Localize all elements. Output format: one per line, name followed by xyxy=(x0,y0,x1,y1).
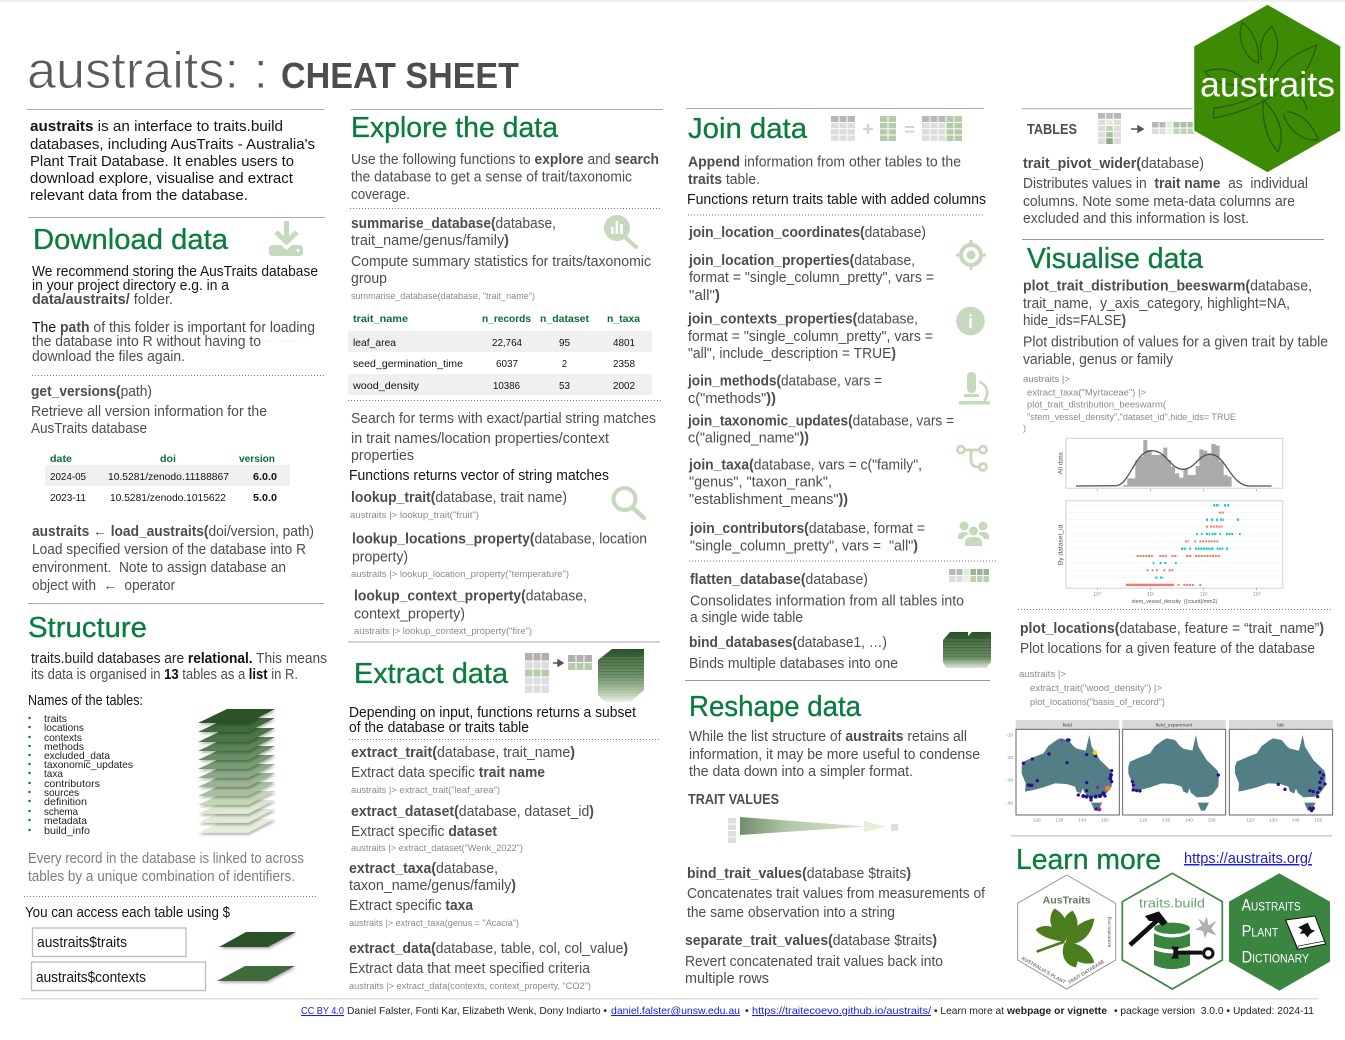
function: plot_trait_distribution_beeswarm xyxy=(1023,279,1328,368)
text: access tables: You can access each table using $ xyxy=(25,905,230,921)
function: join_contexts_properties: format = "single_column_pretty", vars = xyxy=(688,329,933,345)
illustration: stacked tables xyxy=(198,709,275,833)
label: trait values: TRAIT VALUES xyxy=(688,792,779,808)
chart: australia location maps: -40 xyxy=(1006,800,1013,805)
function: summarise_database: group xyxy=(351,271,387,287)
table: summary statistics: seed_germination_time xyxy=(353,358,463,370)
function: separate_trait_values: separate_trait_values(database $traits) xyxy=(685,933,937,949)
chart: australia location maps: 120 xyxy=(1139,817,1148,822)
text: join intro: Append information from other tables to the xyxy=(688,155,961,171)
list: names of the tables: locations xyxy=(44,722,84,734)
function: extract_taxa: extract_taxa(database, xyxy=(349,861,498,877)
chart: australia location maps: field_experiment xyxy=(1156,723,1193,729)
function: join_taxonomic_updates: c("aligned_name")) xyxy=(688,431,809,447)
table: summary statistics: n_taxa xyxy=(607,313,640,325)
function: join_contributors: join_contributors(database, format = xyxy=(689,521,925,537)
text: relational description: its data is organised in 13 tables as a list in R. xyxy=(31,667,298,683)
chart: histogram and density: All data xyxy=(1057,452,1064,474)
icon: microscope xyxy=(959,372,990,404)
function: load_austraits: Load specified version of the database into R xyxy=(32,542,306,558)
list: names of the tables: Names of the tables: xyxy=(28,693,143,709)
panel: tables pivot xyxy=(1022,109,1308,227)
function: join_contexts_properties: "all", include_description = TRUE) xyxy=(688,346,896,362)
text: storage recommendation: We recommend storing the AusTraits database xyxy=(32,264,318,280)
chart: beeswarm by dataset: 10² xyxy=(1200,592,1208,598)
function: flatten_database: a single wide table xyxy=(690,610,803,626)
function: lookup_trait: lookup_trait(database, trait name) xyxy=(351,490,567,506)
function: extract_trait: austraits |> extract_trait("leaf_area") xyxy=(351,785,500,795)
heading: download data: Download data xyxy=(33,224,229,256)
chart: australia location maps: 140 xyxy=(1078,817,1087,822)
function: separate_trait_values: multiple rows xyxy=(685,971,769,987)
table: versions: 2024-05 xyxy=(50,471,86,483)
function: flatten_database: Consolidates information from all tables into xyxy=(690,594,964,610)
function: extract_data xyxy=(349,941,628,991)
table: summary statistics: 95 xyxy=(559,337,570,349)
text: storage recommendation: data/austraits/ folder. xyxy=(32,292,173,308)
code: plot_locations example: plot_locations("basis_of_record") xyxy=(1030,697,1165,707)
function: join_contexts_properties xyxy=(687,312,933,362)
code: beeswarm example: extract_taxa("Myrtaceae") |> xyxy=(1027,388,1146,398)
chart: beeswarm by dataset: By dataset_id xyxy=(1057,525,1064,565)
logo: traits.build hexagon: traits.build xyxy=(1139,896,1205,911)
list: names of the tables: sources xyxy=(44,787,79,799)
text: reshape intro xyxy=(689,729,980,780)
panel: introduction xyxy=(27,110,324,204)
heading: explore the data: Explore the data xyxy=(351,112,559,144)
icon: magnifier xyxy=(614,488,644,518)
function: join_methods: c("methods")) xyxy=(688,391,776,407)
function: extract_data: austraits |> extract_data(contexts, context_property, "CO2") xyxy=(349,981,591,991)
chart: histogram and density xyxy=(1057,438,1283,488)
chart: australia location maps: 140 xyxy=(1292,817,1300,822)
function: trait_pivot_wider: trait_pivot_wider(database) xyxy=(1023,156,1204,172)
function: load_austraits: environment. Note to assign database an xyxy=(32,560,286,576)
chart: australia location maps: 120 xyxy=(1033,817,1041,822)
text: search description: in trait names/location properties/context xyxy=(351,431,609,447)
text: extract intro xyxy=(349,705,636,736)
chart: australia location maps: -10 xyxy=(1006,733,1013,738)
function: lookup_context_property: context_property) xyxy=(354,607,465,623)
panel: introduction: databases, including AusTraits - Australia's xyxy=(30,137,315,153)
link: austraits.org: https://austraits.org/ xyxy=(1184,850,1313,867)
heading: extract data: Extract data xyxy=(354,658,509,690)
list: names of the tables: taxonomic_updates xyxy=(44,759,133,771)
icon: flattened table xyxy=(949,569,989,582)
title: austraits: : xyxy=(27,42,268,100)
icon: traits layer xyxy=(219,932,296,947)
heading: learn more: Learn more xyxy=(1016,844,1161,876)
panel: extract data xyxy=(348,642,660,991)
text: join intro xyxy=(687,155,986,208)
logo: AusTraits hexagon: AusTraits xyxy=(1043,895,1091,906)
text: extract intro: Depending on input, functions returns a subset xyxy=(349,705,636,721)
panel: learn more xyxy=(1011,836,1332,991)
icon: people xyxy=(958,522,989,546)
chart: beeswarm by dataset xyxy=(1057,489,1283,605)
function: lookup_locations_property: lookup_locations_property(database, location xyxy=(352,532,647,548)
function: flatten_database xyxy=(690,572,964,626)
table: summary statistics xyxy=(348,313,652,395)
chart: beeswarm by dataset: 10³ xyxy=(1253,592,1261,598)
function: plot_trait_distribution_beeswarm: Plot distribution of values for a given trait by table xyxy=(1023,335,1328,351)
icon: contexts layer xyxy=(217,966,295,981)
logo: austraits hexagon xyxy=(1194,4,1341,173)
function: summarise_database xyxy=(351,216,651,301)
text: join intro: traits table. xyxy=(688,172,760,188)
chart: australia location maps: -30 xyxy=(1006,778,1013,783)
text: search description: Functions returns vector of string matches xyxy=(349,468,609,484)
logo: AusTraits hexagon: TRAIT DATABASE xyxy=(1067,959,1106,986)
function: join_taxonomic_updates xyxy=(687,414,954,447)
function: extract_taxa xyxy=(349,861,519,928)
chart: australia location maps: 150 xyxy=(1314,817,1323,822)
box: austraits$traits: austraits$traits xyxy=(37,935,127,951)
panel: introduction: austraits is an interface to traits.build xyxy=(30,119,283,135)
table: versions: 10.5281/zenodo.11188867 xyxy=(108,471,229,483)
icon: chart magnifier xyxy=(604,215,636,247)
panel: join data xyxy=(686,108,996,672)
logo: austraits hexagon: austraits xyxy=(1200,66,1335,104)
function: lookup_context_property: lookup_context_property(database, xyxy=(354,589,587,605)
logo: AusTraits hexagon xyxy=(1018,875,1116,989)
icon: location target xyxy=(956,240,986,270)
box: austraits$contexts xyxy=(32,962,206,990)
list: names of the tables: traits xyxy=(44,713,67,725)
function: join_location_properties xyxy=(688,253,934,304)
function: join_location_properties: format = "single_column_pretty", vars = xyxy=(689,270,934,286)
function: lookup_trait: austraits |> lookup_trait("fruit") xyxy=(350,510,479,520)
chart: australia location maps xyxy=(1006,720,1333,822)
function: join_location_properties: "all") xyxy=(689,288,720,304)
list: names of the tables: taxa xyxy=(44,768,63,780)
list: names of the tables: excluded_data xyxy=(44,750,110,762)
function: extract_data: Extract data that meet specified criteria xyxy=(349,961,591,977)
panel: visualise data xyxy=(1006,240,1333,822)
function: join_taxa: "genus", "taxon_rank", xyxy=(689,475,832,491)
text: relational description: traits.build databases are relational. This means xyxy=(31,651,327,667)
function: extract_trait: extract_trait(database, trait_name) xyxy=(351,745,575,761)
icon: stacked tables xyxy=(598,649,644,702)
function: lookup_locations_property xyxy=(351,532,647,579)
footer xyxy=(21,999,1318,1017)
list: names of the tables: definition xyxy=(44,796,87,808)
function: join_taxa xyxy=(688,458,922,508)
text: reshape intro: the data down into a simpler format. xyxy=(689,764,913,780)
function: join_taxa: "establishment_means")) xyxy=(689,492,848,508)
text: storage recommendation xyxy=(32,264,318,365)
table: summary statistics: 53 xyxy=(559,380,570,392)
function: bind_trait_values: the same observation into a string xyxy=(687,905,895,921)
function: summarise_database: Compute summary statistics for traits/taxonomic xyxy=(351,254,651,270)
text: search description: Search for terms with exact/partial string matches xyxy=(351,411,656,427)
function: extract_trait: Extract data specific trait name xyxy=(351,765,545,781)
list: names of the tables xyxy=(28,693,143,837)
text: explore intro: Use the following functions to explore and search xyxy=(351,152,659,168)
list: names of the tables: contexts xyxy=(44,732,82,744)
icon: bound stacks xyxy=(943,632,991,668)
panel: structure xyxy=(24,604,327,990)
table: summary statistics: 4801 xyxy=(613,337,635,349)
table: versions: 2023-11 xyxy=(50,492,86,504)
function: lookup_trait xyxy=(350,490,567,520)
table: summary statistics: 10386 xyxy=(493,380,520,392)
chart: australia location maps: field xyxy=(1063,723,1072,729)
function: extract_taxa: taxon_name/genus/family) xyxy=(349,878,516,894)
code: plot_locations example: austraits |> xyxy=(1019,669,1066,679)
function: join_taxonomic_updates: join_taxonomic_updates(database, vars = xyxy=(687,414,954,430)
icon: branches xyxy=(958,446,986,470)
function: extract_dataset xyxy=(351,804,594,853)
function: get_versions: Retrieve all version information for the xyxy=(31,404,267,420)
table: versions: 10.5281/zenodo.1015622 xyxy=(110,492,226,504)
title: CHEAT SHEET xyxy=(281,55,519,96)
chart: australia location maps: lab xyxy=(1277,723,1284,729)
text: relational description xyxy=(31,651,327,683)
panel: introduction: download explore, visualise and extract xyxy=(30,171,293,187)
chart: australia location maps: 130 xyxy=(1162,817,1171,822)
function: join_location_properties: join_location_properties(database, xyxy=(688,253,915,269)
function: extract_dataset: Extract specific dataset xyxy=(351,824,497,840)
table: versions: date xyxy=(50,453,72,465)
text: explore intro: the database to get a sense of trait/taxonomic xyxy=(351,170,632,186)
heading: visualise data: Visualise data xyxy=(1027,243,1204,275)
text: explore intro: coverage. xyxy=(351,187,410,203)
function: join_location_coordinates: join_location_coordinates(database) xyxy=(688,225,926,241)
function: plot_locations: Plot locations for a given feature of the database xyxy=(1020,641,1315,657)
code: beeswarm example: plot_trait_distribution_beeswarm( xyxy=(1027,400,1166,410)
logo: AusTraits hexagon: austraits.org xyxy=(1106,916,1111,947)
function: lookup_locations_property: property) xyxy=(352,550,408,566)
chart: beeswarm by dataset: 10¹ xyxy=(1147,592,1155,598)
logo: traits.build hexagon xyxy=(1122,873,1222,989)
text: linked records xyxy=(28,851,304,885)
function: trait_pivot_wider xyxy=(1023,156,1308,227)
function: join_taxa: join_taxa(database, vars = c("family", xyxy=(688,458,922,474)
function: load_austraits: object with ← operator xyxy=(32,578,175,594)
chart: beeswarm by dataset: stem_vessel_density ({count}/mm2) xyxy=(1132,599,1218,605)
table: summary statistics: 2002 xyxy=(613,380,635,392)
function: extract_dataset: austraits |> extract_dataset("Wenk_2022") xyxy=(351,843,523,853)
function: extract_dataset: extract_dataset(database, dataset_id) xyxy=(351,804,594,820)
footer: https://traitecoevo.github.io/austraits/ xyxy=(752,1005,931,1017)
title xyxy=(27,42,519,100)
function: bind_databases xyxy=(689,635,898,672)
panel: download data xyxy=(28,218,325,594)
function: separate_trait_values xyxy=(685,933,943,987)
footer: CC BY 4.0 xyxy=(301,1005,344,1017)
table: summary statistics: leaf_area xyxy=(353,337,396,349)
icon: info: i xyxy=(968,312,973,332)
logo: Austraits Plant Dictionary hexagon: PLANT xyxy=(1242,922,1279,941)
list: names of the tables: methods xyxy=(44,741,84,753)
function: extract_trait xyxy=(351,745,575,795)
box: austraits$contexts: austraits$contexts xyxy=(36,970,146,986)
function: bind_databases: bind_databases(database1, …) xyxy=(689,635,887,651)
function: join_contributors: "single_column_pretty", vars = "all") xyxy=(690,539,918,555)
function: join_methods: join_methods(database, vars = xyxy=(687,374,882,390)
table: summary statistics: 6037 xyxy=(496,358,518,370)
function: load_austraits xyxy=(32,524,314,594)
code: beeswarm example: austraits |> xyxy=(1023,374,1070,384)
icon: download xyxy=(269,221,303,256)
logo: AusTraits hexagon: AUSTRALIA'S PLANT xyxy=(1020,956,1066,986)
text: search description xyxy=(349,411,656,484)
chart: australia location maps: 150 xyxy=(1101,817,1109,822)
text: storage recommendation: the database into R without having to xyxy=(32,334,261,350)
box: austraits$traits xyxy=(32,928,186,956)
function: plot_locations: plot_locations(database, feature = “trait_name”) xyxy=(1020,621,1324,637)
function: lookup_context_property xyxy=(354,589,587,636)
label: tables: TABLES xyxy=(1027,122,1077,138)
icon: info xyxy=(956,307,985,335)
list: names of the tables: metadata xyxy=(44,815,87,827)
footer: • xyxy=(745,1005,749,1017)
logo: Austraits Plant Dictionary hexagon xyxy=(1229,873,1330,991)
function: trait_pivot_wider: Distributes values in trait name as individual xyxy=(1023,176,1308,192)
table: summary statistics: 2 xyxy=(562,358,567,370)
chart: beeswarm by dataset: 10⁰ xyxy=(1093,592,1101,598)
code: plot_locations example xyxy=(1019,669,1165,707)
text: storage recommendation: download the files again. xyxy=(32,349,185,365)
chart: australia location maps: 120 xyxy=(1246,817,1254,822)
code: beeswarm example: ) xyxy=(1023,423,1026,433)
logo: Austraits Plant Dictionary hexagon: DICTIONARY xyxy=(1242,948,1309,967)
table: summary statistics: n_records xyxy=(482,313,531,325)
text: storage recommendation: The path of this folder is important for loading xyxy=(32,320,315,336)
panel: introduction: Plant Trait Database. It enables users to xyxy=(30,154,294,170)
icon: trait values funnel xyxy=(728,817,898,843)
list: names of the tables: contributors xyxy=(44,778,100,790)
function: get_versions: get_versions(path) xyxy=(31,384,152,400)
footer: • package version 3.0.0 • xyxy=(1114,1005,1230,1017)
function: plot_locations xyxy=(1020,621,1324,657)
table: summary statistics: 2358 xyxy=(613,358,635,370)
text: explore intro xyxy=(351,152,659,203)
function: summarise_database: trait_name/genus/family) xyxy=(351,233,509,249)
function: join_methods xyxy=(687,374,882,407)
icon: subset table xyxy=(525,653,592,693)
function: lookup_context_property: austraits |> lookup_context_property("fire") xyxy=(354,626,532,636)
function: plot_trait_distribution_beeswarm: trait_name, y_axis_category, highlight=NA, xyxy=(1023,296,1290,312)
table: versions: version xyxy=(239,453,275,465)
table: summary statistics: wood_density xyxy=(352,380,420,392)
function: flatten_database: flatten_database(database) xyxy=(690,572,868,588)
function: extract_taxa: austraits |> extract_taxa(genus = "Acacia") xyxy=(349,918,519,928)
icon: table join xyxy=(831,116,962,141)
table: versions: 6.0.0 xyxy=(253,471,277,483)
function: trait_pivot_wider: excluded and this information is lost. xyxy=(1023,211,1249,227)
icon: pivot wider xyxy=(1098,113,1194,144)
table: versions: 5.0.0 xyxy=(253,492,277,504)
function: plot_trait_distribution_beeswarm: plot_trait_distribution_beeswarm(database, xyxy=(1023,279,1312,295)
panel: introduction: relevant data from the database. xyxy=(30,188,248,204)
text: linked records: tables by a unique combination of identifiers. xyxy=(28,869,295,885)
function: extract_taxa: Extract specific taxa xyxy=(349,898,474,914)
function: bind_trait_values: Concatenates trait values from measurements of xyxy=(687,886,986,902)
function: bind_trait_values: bind_trait_values(database $traits) xyxy=(687,866,911,882)
panel: explore the data xyxy=(348,110,663,636)
function: bind_trait_values xyxy=(687,866,986,921)
text: join intro: Functions return traits table with added columns xyxy=(687,192,986,208)
function: summarise_database: summarise_database(database, "trait_name") xyxy=(351,291,535,301)
heading: join data: Join data xyxy=(688,113,808,145)
table: versions: doi xyxy=(160,453,176,465)
code: beeswarm example xyxy=(1023,374,1236,433)
chart: australia location maps: 140 xyxy=(1185,817,1193,822)
list: names of the tables: build_info xyxy=(44,825,90,837)
text: linked records: Every record in the database is linked to across xyxy=(28,851,304,867)
function: get_versions xyxy=(31,384,267,437)
heading: structure: Structure xyxy=(28,612,147,644)
function: summarise_database: summarise_database(database, xyxy=(351,216,556,232)
heading: reshape data: Reshape data xyxy=(689,691,862,723)
function: lookup_locations_property: austraits |> lookup_location_property("temperature") xyxy=(351,569,569,579)
chart: australia location maps: 130 xyxy=(1269,817,1277,822)
text: reshape intro: While the list structure of austraits retains all xyxy=(689,729,967,745)
code: plot_locations example: extract_trait("wood_density") |> xyxy=(1030,683,1162,693)
table: summary statistics: trait_name xyxy=(353,313,408,325)
footer: webpage or vignette xyxy=(1006,1005,1107,1017)
text: search description: properties xyxy=(351,448,414,464)
panel: reshape data xyxy=(685,680,990,987)
function: separate_trait_values: Revert concatenated trait values back into xyxy=(685,954,943,970)
function: bind_databases: Binds multiple databases into one xyxy=(689,656,898,672)
table: summary statistics: n_dataset xyxy=(540,313,589,325)
footer: daniel.falster@unsw.edu.au xyxy=(611,1005,740,1017)
footer: • Learn more at xyxy=(934,1005,1004,1017)
function: extract_data: extract_data(database, table, col, col_value) xyxy=(349,941,628,957)
chart: australia location maps: 150 xyxy=(1208,817,1216,822)
function: load_austraits: austraits ← load_austraits(doi/version, path) xyxy=(32,524,314,540)
list: names of the tables: schema xyxy=(44,806,78,818)
chart: australia location maps: -20 xyxy=(1006,755,1013,760)
function: plot_trait_distribution_beeswarm: variable, genus or family xyxy=(1023,352,1174,368)
table: summary statistics: 22,764 xyxy=(492,337,522,349)
chart: australia location maps: 130 xyxy=(1055,817,1064,822)
function: trait_pivot_wider: columns. Note some meta-data columns are xyxy=(1023,194,1295,210)
footer: Daniel Falster, Fonti Kar, Elizabeth Wenk, Dony Indiarto • xyxy=(347,1005,607,1017)
text: storage recommendation: in your project directory e.g. in a xyxy=(32,278,230,294)
code: beeswarm example: "stem_vessel_density","dataset_id",hide_ids= TRUE xyxy=(1027,412,1236,422)
table: versions xyxy=(45,453,290,504)
function: get_versions: AusTraits database xyxy=(31,421,147,437)
logo: Austraits Plant Dictionary hexagon: AUSTRAITS xyxy=(1242,896,1301,915)
text: extract intro: of the database or traits table xyxy=(349,720,529,736)
function: join_contributors xyxy=(689,521,925,555)
footer: Updated: 2024-11 xyxy=(1233,1005,1314,1017)
function: plot_trait_distribution_beeswarm: hide_ids=FALSE) xyxy=(1023,313,1126,329)
text: reshape intro: information, it may be more useful to condense xyxy=(689,747,980,763)
function: join_contexts_properties: join_contexts_properties(database, xyxy=(687,312,918,328)
